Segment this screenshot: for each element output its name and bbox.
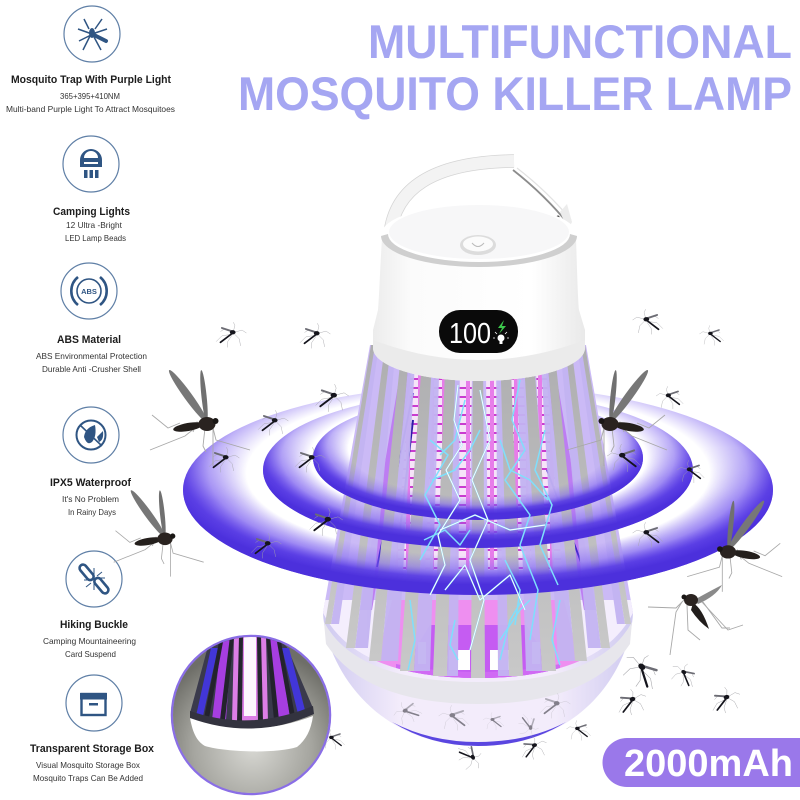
lamp handle xyxy=(390,161,572,234)
feature: IPX5 waterproof: IPX5 Waterproof xyxy=(50,477,131,489)
feature: camping lights: Camping Lights xyxy=(53,206,130,218)
large mosquito lower right xyxy=(648,585,743,655)
feature: IPX5 waterproof xyxy=(50,407,131,517)
large mosquito lower left xyxy=(114,488,204,577)
icon: box xyxy=(66,675,122,731)
lamp cap xyxy=(373,204,585,381)
cage: backdrop and inner core xyxy=(320,340,640,690)
icon: lamp xyxy=(63,136,119,192)
battery display: 100 xyxy=(449,318,491,350)
feature: hiking buckle: Camping Mountaineering xyxy=(43,636,136,646)
feature: storage box: Mosquito Traps Can Be Added xyxy=(33,773,143,783)
feature: ABS material: ABS Material xyxy=(57,334,121,346)
large mosquito left xyxy=(150,368,250,466)
cage: slats xyxy=(325,345,631,678)
feature: camping lights xyxy=(53,136,130,243)
rings front: rings passing in front of the lamp xyxy=(183,439,773,595)
feature: ABS material xyxy=(36,263,147,374)
lower core xyxy=(377,600,580,678)
inner light columns xyxy=(372,373,584,610)
feature: IPX5 waterproof: In Rainy Days xyxy=(68,507,116,517)
rings back: waves behind the lamp xyxy=(183,385,773,595)
power button xyxy=(460,235,496,255)
icon: no water xyxy=(63,407,119,463)
icon: mosquito xyxy=(64,6,120,62)
feature: ABS material: ABS Environmental Protection xyxy=(36,351,147,361)
electric arcs xyxy=(408,380,560,670)
large mosquito right xyxy=(687,498,782,592)
feature: camping lights: LED Lamp Beads xyxy=(65,233,126,243)
feature: mosquito trap: Mosquito Trap With Purple Light xyxy=(11,74,171,86)
feature: hiking buckle xyxy=(43,551,136,659)
battery display xyxy=(439,310,518,353)
mosquitoes trapped in the base xyxy=(390,693,570,739)
feature: hiking buckle: Hiking Buckle xyxy=(60,619,128,631)
feature: hiking buckle: Card Suspend xyxy=(65,649,116,659)
base: transparent storage bowl xyxy=(323,613,633,746)
icon: broken link xyxy=(66,551,122,607)
carabiner wire xyxy=(513,170,570,226)
feature: mosquito trap: Multi-band Purple Light To Attract Mosquitoes xyxy=(6,104,175,114)
capacity badge: 2000mAh xyxy=(624,743,793,785)
icon: ABS: ABS xyxy=(81,287,97,296)
cage ribs xyxy=(190,636,313,722)
feature: mosquito trap: 365+395+410NM xyxy=(60,91,120,101)
feature: mosquito trap xyxy=(6,6,175,114)
feature: storage box: Visual Mosquito Storage Box xyxy=(36,760,141,770)
large mosquito upper right xyxy=(567,368,667,466)
feature: ABS material: Durable Anti -Crusher Shell xyxy=(42,364,141,374)
feature: IPX5 waterproof: It's No Problem xyxy=(62,494,119,504)
small mosquitoes xyxy=(209,309,744,775)
inset: close-up circle xyxy=(170,635,335,800)
feature: camping lights: 12 Ultra -Bright xyxy=(66,220,123,230)
feature: storage box: Transparent Storage Box xyxy=(30,743,155,755)
feature: storage box xyxy=(30,675,155,783)
title xyxy=(238,15,792,120)
